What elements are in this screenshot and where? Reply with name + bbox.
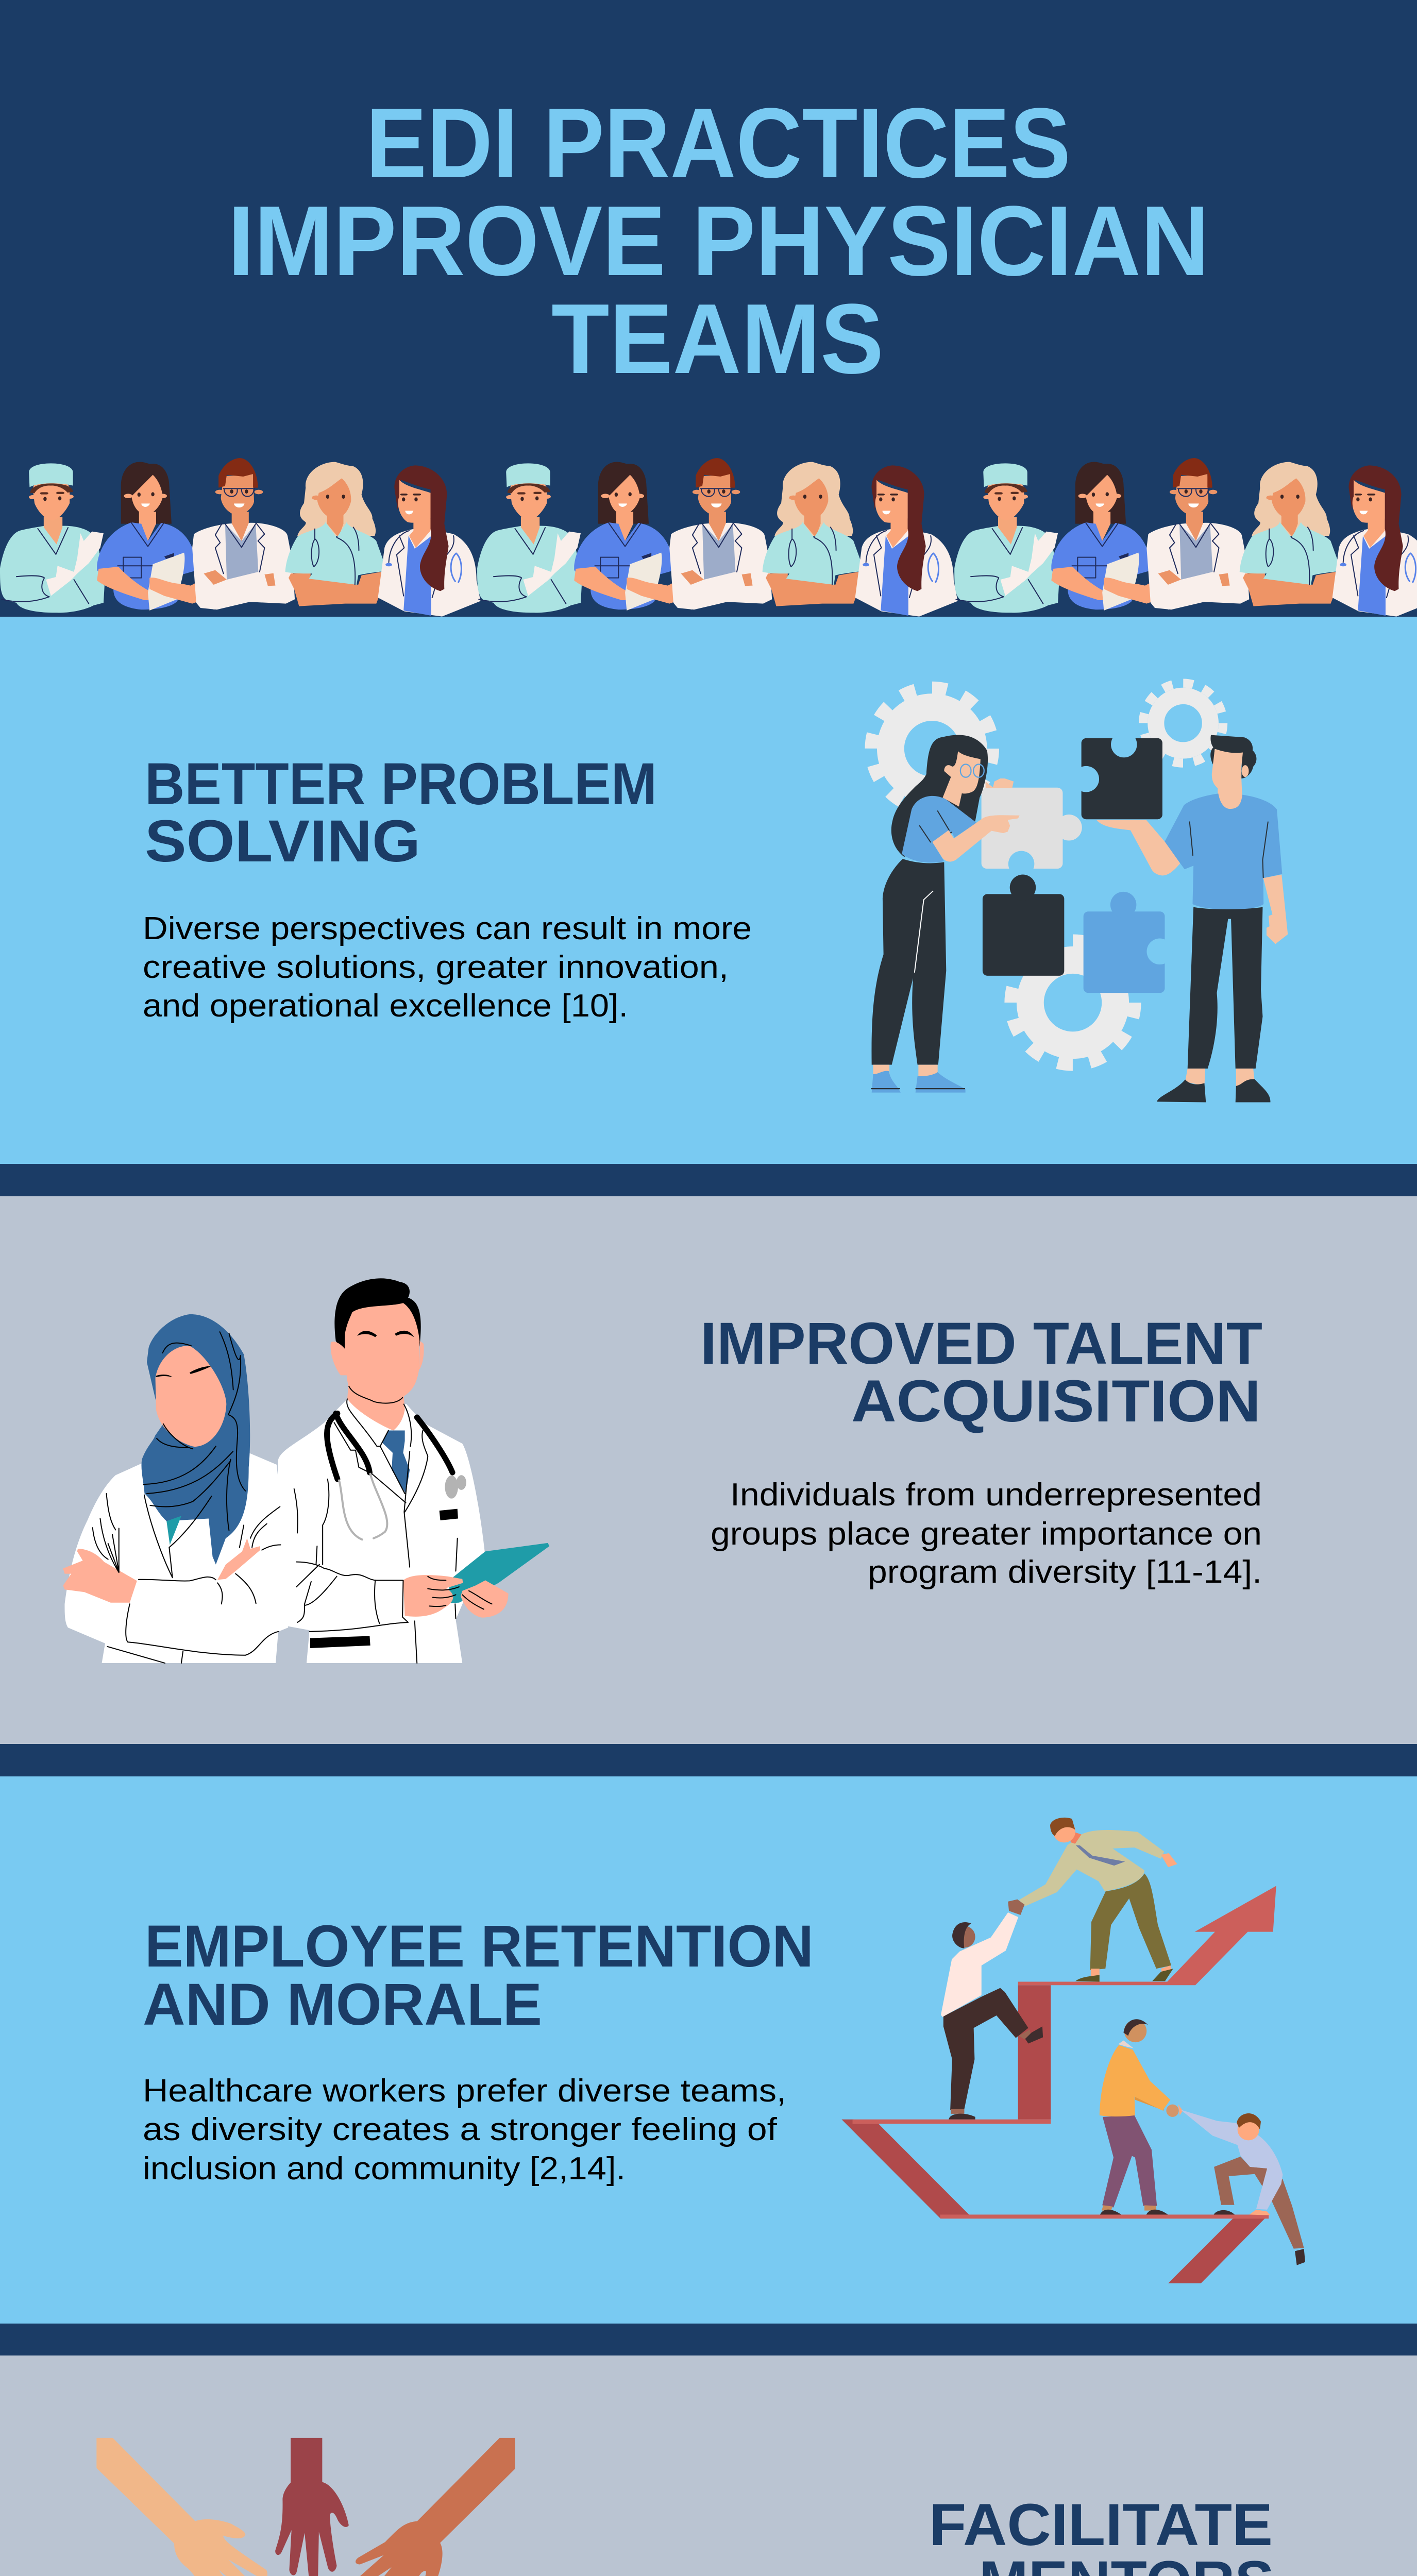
illustration: two doctors	[63, 1278, 549, 1663]
body text: talent acquisition: groups place greater importance on	[711, 1516, 1262, 1552]
panel: better problem solving	[0, 617, 1417, 1164]
body text: talent acquisition: program diversity [11-14].	[868, 1554, 1262, 1590]
body text: problem solving	[143, 911, 752, 1024]
heading: improved talent acquisition: ACQUISITION	[851, 1368, 1261, 1434]
heading: better problem solving	[145, 751, 657, 874]
heading: employee retention and morale: AND MORALE	[143, 1972, 542, 2038]
heading: better problem solving: SOLVING	[145, 808, 420, 874]
divider band	[0, 1744, 1417, 1776]
body text: problem solving: Diverse perspectives can result in more	[143, 911, 752, 946]
panel: improved talent acquisition	[0, 1196, 1417, 1744]
heading: facilitate mentors: FACILITATE	[929, 2492, 1273, 2558]
body text: retention	[143, 2073, 786, 2187]
divider band	[0, 1164, 1417, 1196]
heading: improved talent acquisition: IMPROVED TALENT	[700, 1311, 1262, 1377]
body text: problem solving: creative solutions, greater innovation,	[143, 950, 729, 985]
title: EDI PRACTICES	[366, 87, 1071, 198]
header panel	[0, 0, 1417, 617]
heading: employee retention and morale	[143, 1913, 814, 2038]
heading: employee retention and morale: EMPLOYEE RETENTION	[145, 1913, 814, 1979]
heading: improved talent acquisition	[700, 1311, 1262, 1434]
body text: problem solving: and operational excellence [10].	[143, 988, 628, 1024]
illustration: colleagues helping each other climb a rising arrow	[841, 1818, 1305, 2283]
body text: retention: inclusion and community [2,14].	[143, 2151, 626, 2187]
body text: talent acquisition: Individuals from underrepresented	[730, 1477, 1262, 1513]
title: IMPROVE PHYSICIAN	[228, 185, 1209, 296]
illustration: circle of diverse hands	[96, 2438, 515, 2576]
panel: facilitate mentors	[0, 2355, 1417, 2576]
medical staff illustration row	[0, 458, 1417, 617]
panel: employee retention and morale	[0, 1776, 1417, 2324]
body text: retention: Healthcare workers prefer diverse teams,	[143, 2073, 786, 2109]
illustration: two people assembling puzzle pieces with gears	[871, 683, 1288, 1103]
divider band	[0, 2324, 1417, 2355]
title	[228, 87, 1209, 394]
body text: talent acquisition	[711, 1477, 1262, 1590]
body text: retention: as diversity creates a stronger feeling of	[143, 2112, 778, 2147]
title: TEAMS	[551, 283, 884, 394]
heading: better problem solving: BETTER PROBLEM	[145, 751, 657, 817]
